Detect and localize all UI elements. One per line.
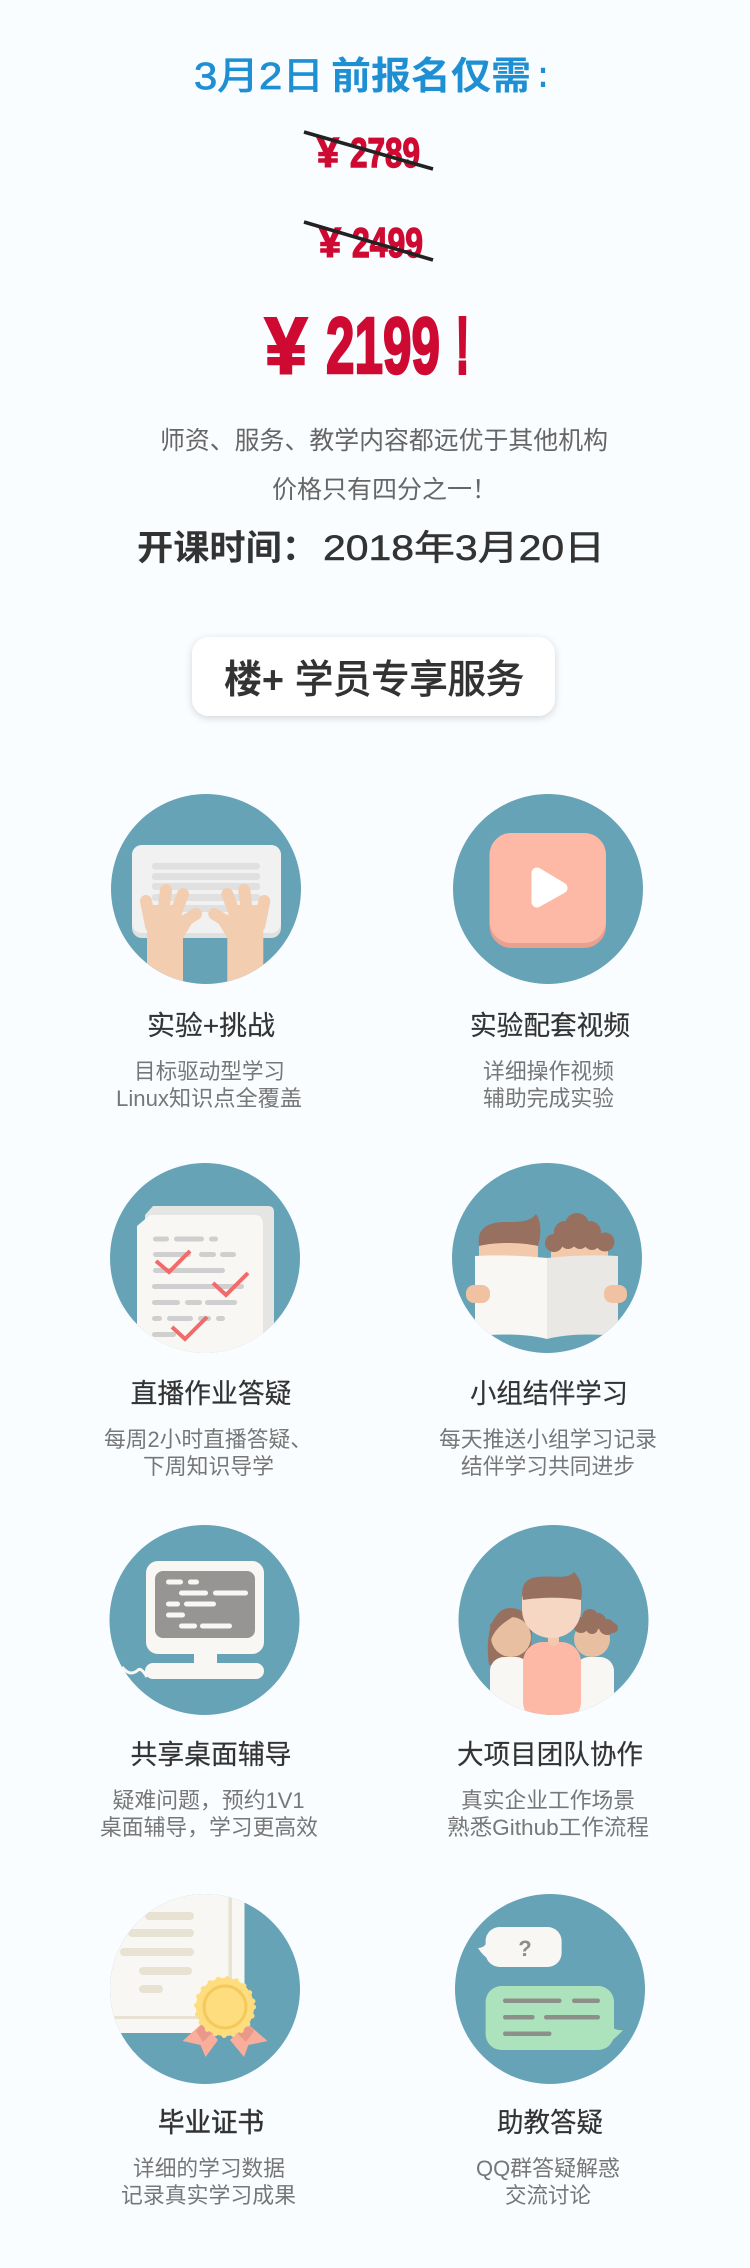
description — [100, 1788, 318, 1840]
description text — [160, 427, 608, 504]
panel: lab videos — [453, 794, 643, 1111]
course start date: 开课时间： — [137, 529, 318, 568]
section heading button: 学员专享服务 — [295, 659, 524, 702]
description — [483, 1059, 614, 1111]
description — [116, 1059, 302, 1111]
heading: 大项目团队协作 — [457, 1740, 643, 1770]
icon: three team members — [458, 1525, 648, 1727]
description: 疑难问题，预约1V1 — [112, 1788, 304, 1813]
description — [121, 2156, 296, 2208]
panel: live homework Q&A — [104, 1163, 312, 1479]
panel: labs and challenges — [111, 794, 302, 1111]
description: 详细的学习数据 — [133, 2156, 285, 2181]
struck-out price 2499 — [304, 219, 433, 266]
panel: graduation certificate — [100, 1885, 300, 2208]
struck-out price 2789: ¥ — [317, 129, 340, 176]
icon: certificate with medal — [100, 1885, 300, 2084]
text: ! — [456, 301, 469, 390]
description: 桌面辅导，学习更高效 — [100, 1815, 318, 1840]
icon: chat bubbles: ? — [518, 1936, 532, 1961]
course start date — [137, 529, 605, 568]
panel: group study — [439, 1163, 657, 1479]
description: 交流讨论 — [505, 2183, 591, 2208]
struck-out price 2499: 2499 — [352, 219, 423, 266]
description: 真实企业工作场景 — [461, 1788, 635, 1813]
final price 2199: 2199 — [326, 301, 440, 390]
description: Linux知识点全覆盖 — [116, 1086, 302, 1111]
description: 下周知识导学 — [143, 1454, 274, 1479]
description: 目标驱动型学习 — [134, 1059, 285, 1084]
final price 2199: ¥ — [265, 301, 307, 390]
heading: 实验配套视频 — [470, 1011, 630, 1041]
description: QQ群答疑解惑 — [476, 2156, 620, 2181]
icon: play button — [453, 794, 643, 984]
title: early-bird price heading — [194, 54, 548, 98]
description: 详细操作视频 — [483, 1059, 614, 1084]
title: early-bird price heading: 3月2日 — [194, 56, 324, 98]
icon: computer with code — [110, 1525, 300, 1715]
description: 熟悉Github工作流程 — [447, 1815, 649, 1840]
description text: 师资、服务、教学内容都远优于其他机构 — [160, 427, 608, 455]
description: 辅助完成实验 — [483, 1086, 614, 1111]
description: 每天推送小组学习记录 — [439, 1427, 657, 1452]
final price 2199 — [265, 301, 469, 390]
icon: two people reading a newspaper — [452, 1163, 642, 1353]
heading: 毕业证书 — [158, 2108, 264, 2138]
description: 记录真实学习成果 — [121, 2183, 296, 2208]
struck-out price 2789 — [304, 129, 433, 176]
panel: teaching assistant Q&A — [455, 1894, 645, 2208]
section heading button: 楼+ — [224, 659, 284, 702]
icon: homework pages with check marks — [110, 1163, 300, 1360]
icon: hands on keyboard — [111, 794, 301, 990]
heading: 实验+挑战 — [147, 1011, 275, 1041]
heading: 直播作业答疑 — [130, 1379, 292, 1409]
struck-out price 2499: ¥ — [319, 219, 342, 266]
title: early-bird price heading: : — [538, 54, 548, 96]
icon: chat bubbles — [455, 1894, 645, 2084]
section heading button — [192, 637, 555, 716]
heading: 助教答疑 — [497, 2108, 603, 2138]
title: early-bird price heading: 前报名仅需 — [331, 56, 531, 98]
description — [447, 1788, 649, 1840]
heading: 共享桌面辅导 — [130, 1740, 292, 1770]
panel: shared desktop tutoring — [100, 1525, 318, 1840]
description text: 价格只有四分之一！ — [272, 476, 497, 504]
description — [439, 1427, 657, 1479]
panel: team project collaboration — [447, 1525, 649, 1840]
description — [476, 2156, 620, 2208]
struck-out price 2789: 2789 — [350, 129, 420, 176]
description: 每周2小时直播答疑、 — [104, 1427, 312, 1452]
course start date: 2018年3月20日 — [323, 529, 605, 568]
description — [104, 1427, 312, 1479]
description: 结伴学习共同进步 — [461, 1454, 635, 1479]
heading: 小组结伴学习 — [470, 1379, 628, 1409]
